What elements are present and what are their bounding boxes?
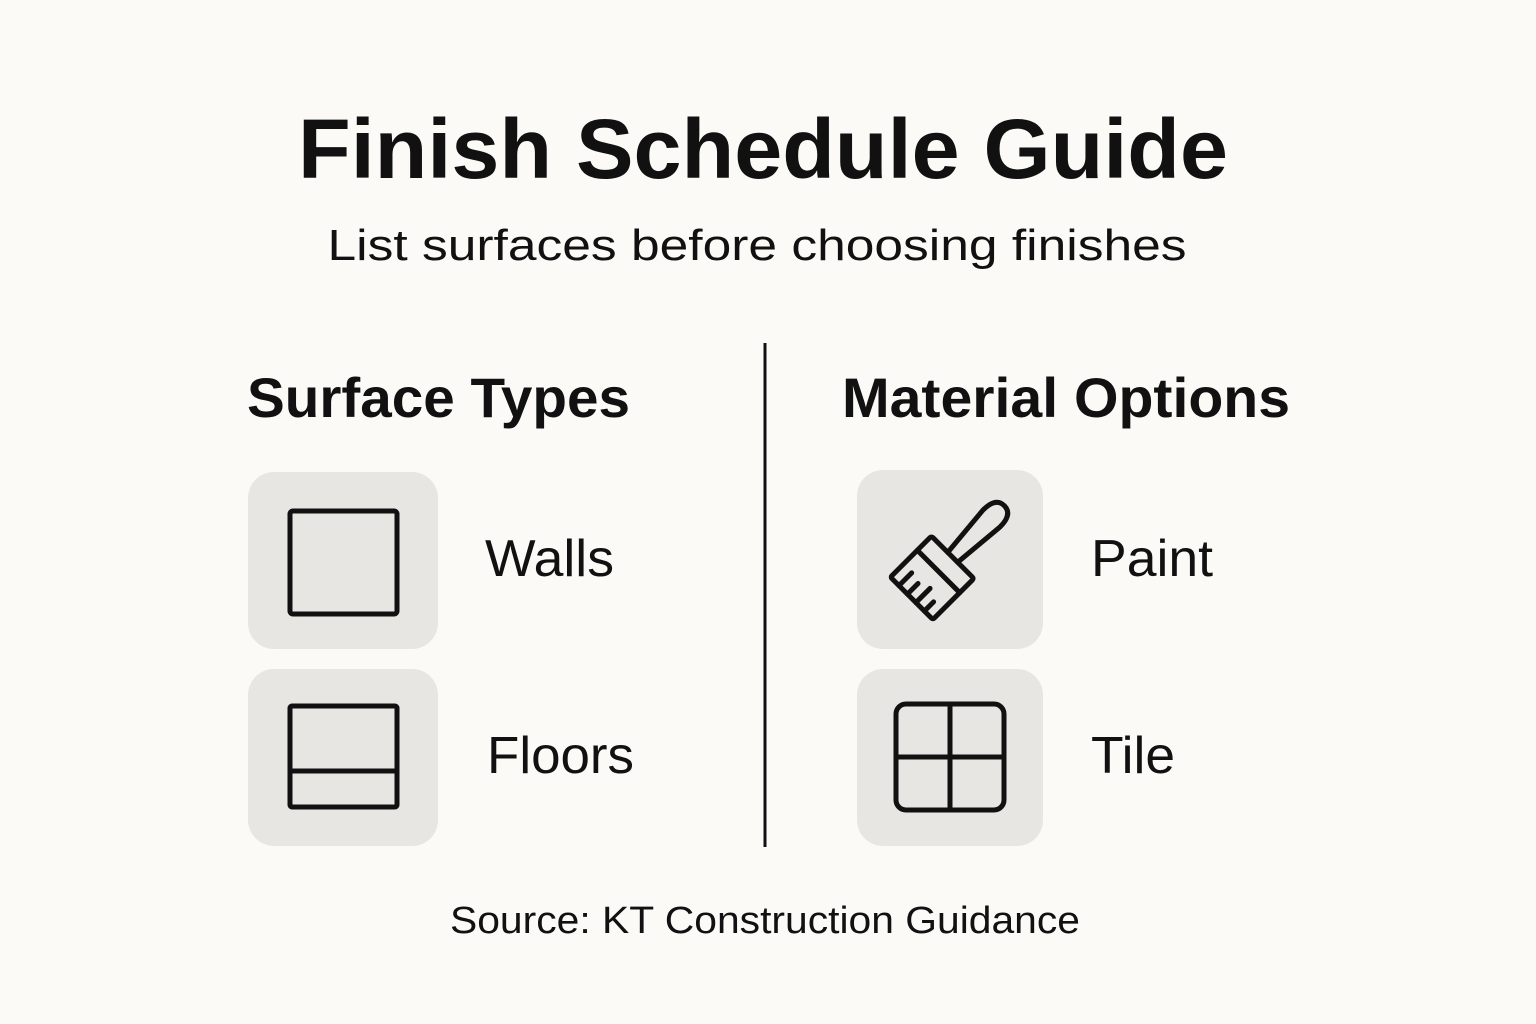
- panel: material options: [842, 366, 1290, 846]
- heading: surface types: Surface Types: [247, 366, 630, 429]
- icon: tile: [857, 669, 1043, 846]
- label: paint: Paint: [1091, 530, 1214, 588]
- title: Finish Schedule Guide: [298, 102, 1228, 196]
- label: tile: Tile: [1091, 727, 1175, 785]
- label: walls: Walls: [485, 530, 614, 588]
- heading: material options: Material Options: [842, 366, 1290, 429]
- icon: walls: [248, 472, 438, 649]
- icon: floors: [248, 669, 438, 846]
- label: floors: Floors: [487, 727, 634, 785]
- icon: paint brush: [857, 470, 1043, 649]
- panel: surface types: [247, 366, 634, 846]
- subtitle: List surfaces before choosing finishes: [328, 221, 1186, 270]
- source: Source: KT Construction Guidance: [450, 900, 1080, 942]
